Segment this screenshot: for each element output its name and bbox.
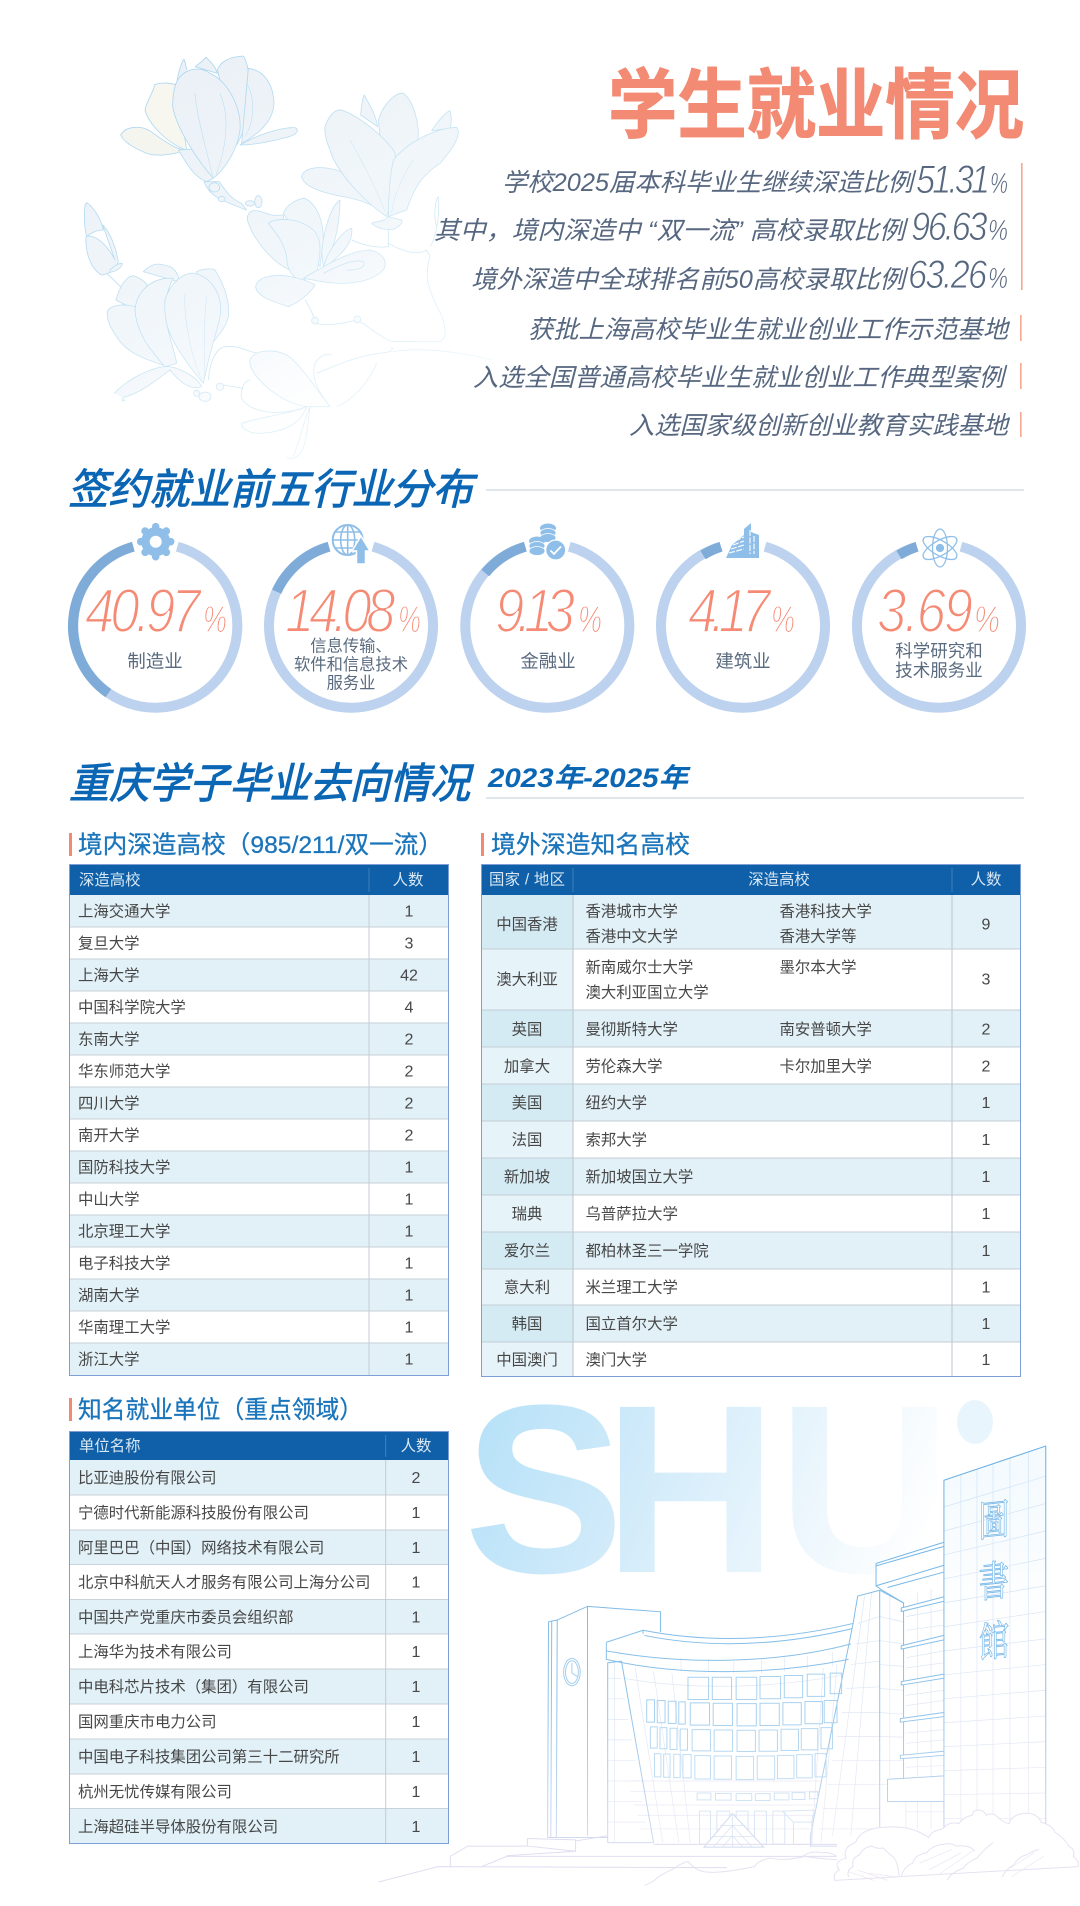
table: overseas universities: 南安普顿大学 [780,1020,872,1038]
table: domestic universities: 复旦大学 [78,934,140,952]
icon: atom [920,529,960,567]
table: overseas universities: 劳伦森大学 [586,1058,662,1076]
table: overseas universities: 2 [982,1058,991,1076]
table: domestic universities: 1 [405,1320,414,1336]
table: overseas universities: 美国 [512,1094,542,1112]
table: notable employers: 2 [412,1470,421,1487]
table: overseas universities: 都柏林圣三一学院 [586,1241,709,1260]
donut: information technology: 服务业 [327,674,375,692]
donut: information technology: % [398,599,421,641]
table: domestic universities: 浙江大学 [78,1350,140,1368]
table: domestic universities: 1 [405,1288,414,1304]
table: overseas universities: 香港大学等 [780,928,856,946]
table: notable employers: 北京中科航天人才服务有限公司上海分公司 [78,1574,370,1592]
table: notable employers: 1 [412,1679,421,1696]
table: domestic universities: 四川大学 [78,1094,140,1112]
donut: scientific research: 技术服务业 [895,660,983,680]
table: domestic universities: 2 [405,1128,414,1144]
table: overseas universities: 澳门大学 [586,1351,647,1369]
table: overseas universities: 国家 / 地区 [489,870,565,888]
text block: further study statistics: 境外深造中全球排名前50高校录取比例 [471,266,909,294]
table: domestic universities [69,864,449,1376]
illustration: magnolia branch [84,56,493,459]
heading: Chongqing graduates [69,760,1024,807]
table: notable employers: 比亚迪股份有限公司 [78,1469,217,1487]
donut: manufacturing: % [203,599,227,641]
icon: gear [137,523,174,560]
text block: honours: 入选国家级创新创业教育实践基地 [629,412,1011,440]
table: overseas universities: 索邦大学 [586,1131,647,1149]
text block: further study statistics: % [988,263,1008,295]
table: domestic universities: 42 [400,968,418,984]
donut: manufacturing [73,523,237,708]
table: overseas universities: 1 [982,1169,991,1186]
table: overseas universities: 米兰理工大学 [586,1278,678,1296]
icon: globe with arrow [333,525,370,564]
subheading: notable employers: 知名就业单位（重点领域） [78,1396,363,1424]
table: notable employers: 阿里巴巴（中国）网络技术有限公司 [78,1539,324,1557]
table: overseas universities: 1 [982,1095,991,1112]
signage: library name on tower: 圖 [979,1487,1009,1549]
table: notable employers: 上海华为技术有限公司 [78,1643,232,1661]
table: overseas universities: 法国 [512,1131,542,1149]
table: domestic universities: 人数 [393,871,423,889]
table: overseas universities: 新加坡国立大学 [586,1168,693,1186]
donut: information technology: 信息传输、 [310,638,392,656]
text block: honours: 入选全国普通高校毕业生就业创业工作典型案例 [473,364,1008,392]
donut: finance [465,524,629,708]
table: overseas universities: 意大利 [504,1278,550,1296]
table: overseas universities: 1 [982,1132,991,1149]
table: domestic universities: 1 [405,1160,414,1176]
text block: further study statistics: % [990,168,1008,200]
table: overseas universities: 澳大利亚 [496,970,558,988]
table: notable employers: 杭州无忧传媒有限公司 [78,1783,232,1801]
table: domestic universities: 3 [405,936,414,952]
table: overseas universities: 加拿大 [504,1056,550,1076]
table: overseas universities: 1 [982,1316,991,1333]
text block: further study statistics: 96.63 [911,204,988,249]
text block: further study statistics: 学校2025届本科毕业生继续深造比例 [502,169,917,197]
table: notable employers: 1 [412,1610,421,1626]
table: overseas universities: 新南威尔士大学 [586,958,693,976]
table: overseas universities: 香港科技大学 [780,902,872,920]
watermark: SHU letters: H [604,1355,777,1623]
table: domestic universities: 1 [405,1224,414,1240]
heading: Chongqing graduates: 2023年-2025年 [487,763,691,793]
donut: finance: 金融业 [520,650,576,672]
table: domestic universities: 上海交通大学 [78,902,170,920]
text block: further study statistics: 51.31 [916,157,990,202]
donut: scientific research: 科学研究和 [895,641,983,661]
table: overseas universities: 深造高校 [748,870,810,888]
signage: library name on tower [979,1487,1009,1670]
table: overseas universities [481,864,1021,1377]
table: notable employers: 1 [412,1505,421,1522]
table: domestic universities: 2 [405,1064,414,1080]
table: overseas universities: 1 [982,1352,991,1369]
table: domestic universities: 湖南大学 [78,1286,140,1304]
table: domestic universities: 深造高校 [79,871,141,889]
illustration: library building [378,1446,1078,1885]
table: domestic universities: 电子科技大学 [78,1254,170,1272]
table: overseas universities: 人数 [971,870,1001,888]
table: domestic universities: 北京理工大学 [78,1222,170,1240]
signage: library name on tower: 書 [979,1548,1009,1610]
table: overseas universities: 韩国 [512,1315,542,1333]
table: notable employers: 中国电子科技集团公司第三十二研究所 [78,1748,340,1766]
table: domestic universities: 2 [405,1032,414,1048]
donut: construction [661,523,825,708]
donut: information technology: 14.08 [285,577,396,646]
table: overseas universities: 新加坡 [504,1168,550,1186]
watermark: SHU letters: U [778,1355,951,1623]
table: overseas universities: 瑞典 [512,1205,542,1223]
table: overseas universities: 1 [982,1280,991,1296]
table: domestic universities: 中山大学 [78,1190,140,1208]
table: overseas universities: 3 [982,972,991,988]
table: overseas universities: 卡尔加里大学 [780,1058,872,1076]
text block: honours [473,315,1022,440]
table: overseas universities: 墨尔本大学 [780,958,856,976]
table: notable employers: 单位名称 [79,1437,141,1455]
donut: manufacturing: 40.97 [85,577,202,646]
table: overseas universities: 澳大利亚国立大学 [586,984,709,1002]
table: overseas universities: 曼彻斯特大学 [586,1020,678,1038]
donut: scientific research: % [974,599,1000,641]
table: overseas universities: 中国澳门 [496,1351,558,1369]
table: notable employers: 宁德时代新能源科技股份有限公司 [78,1504,309,1522]
heading: top five industries: 签约就业前五行业分布 [68,466,478,513]
table: overseas universities: 中国香港 [496,916,558,934]
table: domestic universities: 2 [405,1096,414,1112]
table: domestic universities: 1 [405,1256,414,1272]
donut: information technology [269,525,433,708]
table: domestic universities: 4 [405,1000,414,1016]
table: overseas universities: 1 [982,1243,991,1260]
table: notable employers: 1 [412,1540,421,1557]
table: notable employers: 1 [412,1749,421,1766]
text block: further study statistics: % [988,215,1008,247]
table: domestic universities: 1 [405,1352,414,1368]
subheading: overseas universities: 境外深造知名高校 [491,831,690,859]
table: overseas universities: 纽约大学 [586,1094,647,1112]
donut: scientific research: 3.69 [877,577,973,646]
table: notable employers: 国网重庆市电力公司 [78,1713,217,1731]
table: domestic universities: 上海大学 [78,966,140,984]
text block: honours: 获批上海高校毕业生就业创业工作示范基地 [528,316,1011,344]
table: overseas universities: 1 [982,1206,991,1223]
table: overseas universities: 2 [982,1022,991,1038]
table: notable employers: 上海超硅半导体股份有限公司 [78,1818,278,1836]
donut: manufacturing: 制造业 [127,650,183,672]
watermark: SHU letters [464,1355,993,1623]
table: overseas universities: 9 [982,916,991,934]
table: overseas universities: 国立首尔大学 [586,1315,678,1333]
table: overseas universities: 乌普萨拉大学 [586,1205,678,1223]
table: notable employers: 1 [412,1819,421,1836]
table: notable employers: 中电科芯片技术（集团）有限公司 [78,1678,309,1696]
signage: library name on tower: 館 [979,1608,1009,1670]
donut: construction: 4.17 [688,577,772,646]
table: notable employers: 1 [412,1714,421,1731]
table: notable employers: 1 [412,1644,421,1661]
table: domestic universities: 华东师范大学 [78,1062,170,1080]
text block: further study statistics [434,157,1023,297]
table: domestic universities: 东南大学 [78,1030,140,1048]
table: domestic universities: 1 [405,904,414,920]
donut: finance: % [578,599,602,641]
text block: further study statistics: 63.26 [908,252,987,297]
icon: buildings [726,523,759,558]
table: notable employers: 1 [412,1784,421,1801]
table: domestic universities: 南开大学 [78,1126,140,1144]
table: notable employers [69,1431,449,1844]
table: notable employers: 中国共产党重庆市委员会组织部 [78,1608,293,1626]
donut: information technology: 软件和信息技术 [294,656,408,674]
subheading: domestic universities: 境内深造高校（985/211/双一流） [78,831,443,859]
table: overseas universities: 爱尔兰 [504,1242,550,1260]
icon: coins and check [529,524,566,560]
table: notable employers: 人数 [401,1437,431,1455]
table: overseas universities: 香港城市大学 [586,902,678,920]
table: domestic universities: 国防科技大学 [78,1158,170,1176]
table: overseas universities: 英国 [512,1020,542,1038]
heading: Chongqing graduates: 重庆学子毕业去向情况 [69,760,474,807]
donut: finance: 9.13 [495,577,575,646]
donut: construction: 建筑业 [715,650,771,672]
table: domestic universities: 中国科学院大学 [78,998,186,1016]
table: domestic universities: 华南理工大学 [78,1318,170,1336]
table: domestic universities: 1 [405,1192,414,1208]
title: 学生就业情况 [608,64,1024,149]
donut: construction: % [771,599,795,641]
text block: further study statistics: 其中，境内深造中 “双一流” 高校录取比例 [434,217,909,245]
watermark: SHU letters: S [464,1355,624,1623]
table: notable employers: 1 [412,1574,421,1592]
donut: scientific research [857,529,1021,708]
table: overseas universities: 香港中文大学 [586,928,678,946]
